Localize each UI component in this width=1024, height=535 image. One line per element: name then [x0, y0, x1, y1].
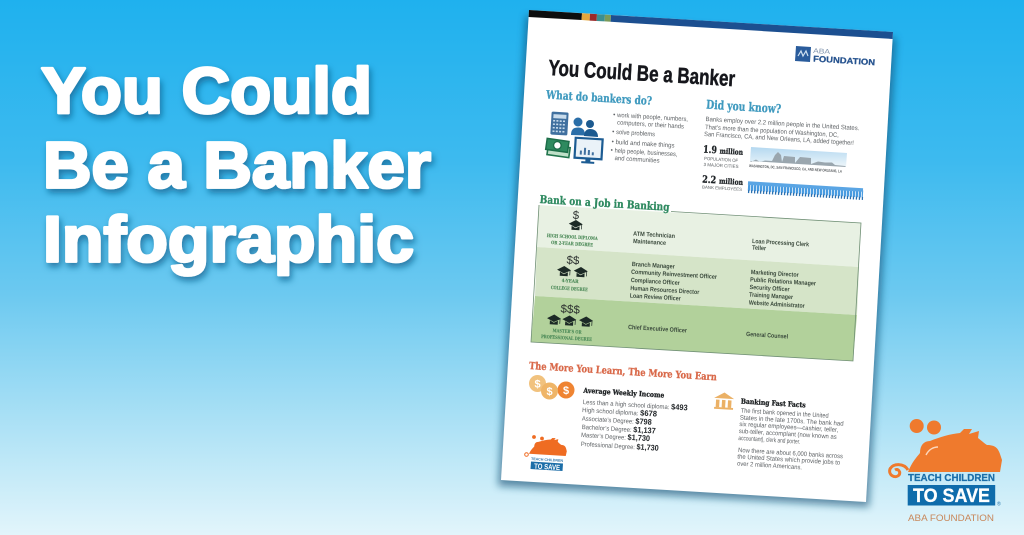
- tier: college: 4-YEAR: [561, 278, 579, 285]
- jobs: college left: Compliance Officer: [631, 277, 680, 287]
- fast facts: [737, 397, 844, 471]
- jobs: high school left: [633, 231, 675, 247]
- fast facts: States in the late 1700s. The bank had: [740, 415, 844, 428]
- stat: 2.2 million: [702, 175, 744, 192]
- tier: high school: $: [572, 210, 580, 222]
- logo: small teach children to save: TO SAVE: [534, 462, 560, 472]
- bullet list: and communities: [614, 155, 660, 165]
- tier: advanced degree: PROFESSIONAL DEGREE: [541, 334, 593, 343]
- panel: job bands: [531, 193, 861, 361]
- jobs: college right: Marketing Director: [751, 269, 799, 279]
- stat: 2.2 million: 2.2 million: [702, 175, 744, 188]
- paper shadow: [498, 16, 896, 507]
- tier: high school: [547, 210, 598, 249]
- income list: Less than a high school diploma: $493: [583, 397, 688, 412]
- band: advanced degree: [531, 296, 857, 361]
- band: high school: [537, 205, 861, 267]
- bullet list: [610, 112, 688, 165]
- bullet list: build and make things: [615, 139, 675, 150]
- income list: [581, 386, 688, 453]
- headline: Be a Banker: [43, 128, 431, 202]
- logo: ABA Foundation: [795, 46, 875, 67]
- stat: 1.9 million: 3 MAJOR CITIES: [703, 162, 739, 169]
- icon: coins: $: [563, 385, 569, 397]
- stat: 2.2 million: BANK EMPLOYEES: [702, 185, 742, 192]
- fast facts: sub-teller, accomplant (now known as: [739, 428, 837, 441]
- logo: small teach children to save: [525, 435, 568, 472]
- income list: High school diploma: $678: [582, 405, 658, 419]
- tier: advanced degree: $$$: [560, 303, 581, 317]
- icon: bank building: [714, 392, 734, 410]
- icon: coins: $: [534, 378, 541, 390]
- piggy bank: [908, 429, 1002, 472]
- did you know text: That’s more than the population of Washington, DC,: [705, 124, 839, 139]
- did you know text: [704, 116, 860, 147]
- fast facts: accountant), clerk and porter.: [738, 435, 801, 446]
- bullet list: •: [610, 147, 613, 154]
- heading: what do bankers do: What do bankers do?: [545, 87, 653, 108]
- flyer page: [501, 10, 893, 502]
- icon: coins: $: [546, 386, 553, 398]
- top colour bar: [529, 10, 893, 39]
- headline: You Could: [41, 54, 372, 127]
- registered mark: ®: [997, 500, 1001, 508]
- jobs: college right: [749, 269, 817, 310]
- income list: Professional Degree: $1,730: [581, 439, 659, 453]
- logo: teach children to save: [890, 419, 1002, 523]
- jobs: high school right: Loan Processing Clerk: [752, 238, 810, 248]
- tier: college: COLLEGE DEGREE: [551, 285, 588, 293]
- chart: city skyline: [749, 147, 847, 174]
- bullet list: help people, businesses,: [614, 148, 678, 158]
- bullet list: computers, or their hands: [617, 120, 684, 131]
- jobs: college right: Training Manager: [749, 292, 794, 301]
- jobs: college right: Public Relations Manager: [750, 277, 817, 287]
- logo text: to save: TO SAVE: [913, 486, 990, 507]
- jobs: high school left: ATM Technician: [633, 231, 675, 240]
- jobs: college left: [630, 261, 718, 303]
- tier: advanced degree: MASTER’S OR: [552, 328, 582, 336]
- tier: high school: OR 2-YEAR DEGREE: [551, 240, 594, 249]
- jobs: college left: Branch Manager: [632, 261, 675, 271]
- flyer title: You Could Be a Banker: [548, 55, 736, 91]
- logo text: teach children: TEACH CHILDREN: [908, 473, 995, 484]
- fast facts: the United States which provide jobs to: [737, 454, 841, 467]
- coins: [910, 419, 941, 434]
- jobs: college left: Community Reinvestment Officer: [631, 269, 718, 281]
- icon: money: [545, 138, 571, 158]
- bullet list: work with people, numbers,: [616, 112, 688, 123]
- income list: Master’s Degree: $1,730: [581, 430, 651, 443]
- band border: [531, 205, 861, 361]
- bullet list: •: [611, 139, 614, 146]
- logo: small teach children to save: TEACH CHILDREN: [531, 457, 564, 463]
- tier: college: $$: [566, 255, 580, 267]
- icon: monitor: [574, 138, 603, 164]
- to save box: [908, 485, 995, 506]
- jobs: high school right: Teller: [752, 245, 767, 252]
- heading: bank on a job: Bank on a Job in Banking: [539, 193, 670, 214]
- jobs: high school left: Maintenance: [633, 238, 667, 247]
- logo text: aba foundation: ABA FOUNDATION: [908, 513, 994, 523]
- jobs: college left: Loan Review Officer: [630, 293, 681, 303]
- headline: Infographic: [43, 202, 414, 276]
- pig tail: [890, 465, 908, 477]
- fast facts: Now there are about 6,000 banks across: [738, 447, 843, 460]
- coin slot: [926, 447, 938, 455]
- fast facts: Banking Fast Facts: [741, 397, 806, 409]
- jobs: college right: Security Officer: [749, 284, 790, 293]
- tier: advanced degree: [541, 303, 593, 343]
- income list: Average Weekly Income: [582, 386, 665, 400]
- chart: row of people: [748, 183, 863, 198]
- bullet list: solve problems: [616, 129, 655, 138]
- bullet list: •: [612, 129, 615, 136]
- income list: Bachelor’s Degree: $1,137: [582, 422, 656, 435]
- stat: 1.9 million: 1.9 million: [703, 145, 744, 158]
- icon: coins: [529, 375, 574, 400]
- tier: high school: HIGH SCHOOL DIPLOMA: [547, 233, 598, 242]
- logo: ABA Foundation: ABA: [813, 48, 831, 56]
- chart: city skyline: WASHINGTON, DC, SAN FRANCISCO, CA, AND NEW ORLEANS, LA: [749, 164, 842, 174]
- band: college: [535, 247, 859, 315]
- heading: did you know: Did you know?: [706, 98, 782, 116]
- did you know text: Banks employ over 2.2 million people in the United States.: [705, 116, 860, 132]
- income list: Associate’s Degree: $798: [582, 414, 652, 427]
- job: chief executive: Chief Executive Officer: [628, 324, 688, 335]
- icon: calculator: [550, 112, 569, 136]
- jobs: college left: Human Resources Director: [630, 285, 700, 296]
- bullet list: •: [613, 112, 616, 119]
- tier: college: [551, 255, 588, 293]
- stat: 1.9 million: POPULATION OF: [704, 156, 738, 163]
- fast facts: over 2 million Americans.: [737, 461, 802, 471]
- headline: [41, 54, 431, 276]
- job: general counsel: General Counsel: [746, 331, 788, 341]
- logo: ABA Foundation: FOUNDATION: [813, 54, 875, 67]
- did you know text: San Francisco, CA, and New Orleans, LA, added together!: [704, 131, 854, 147]
- fast facts: six regular employees—cashier, teller,: [739, 421, 839, 434]
- heading: the more you learn: The More You Learn, The More You Earn: [529, 361, 718, 383]
- jobs: college right: Website Administrator: [749, 300, 805, 310]
- panel: flyer: [501, 10, 893, 502]
- jobs: high school right: [752, 238, 810, 252]
- fast facts: The first bank opened in the United: [741, 408, 829, 420]
- stat: 1.9 million: [703, 145, 744, 169]
- icon: people: [571, 118, 598, 137]
